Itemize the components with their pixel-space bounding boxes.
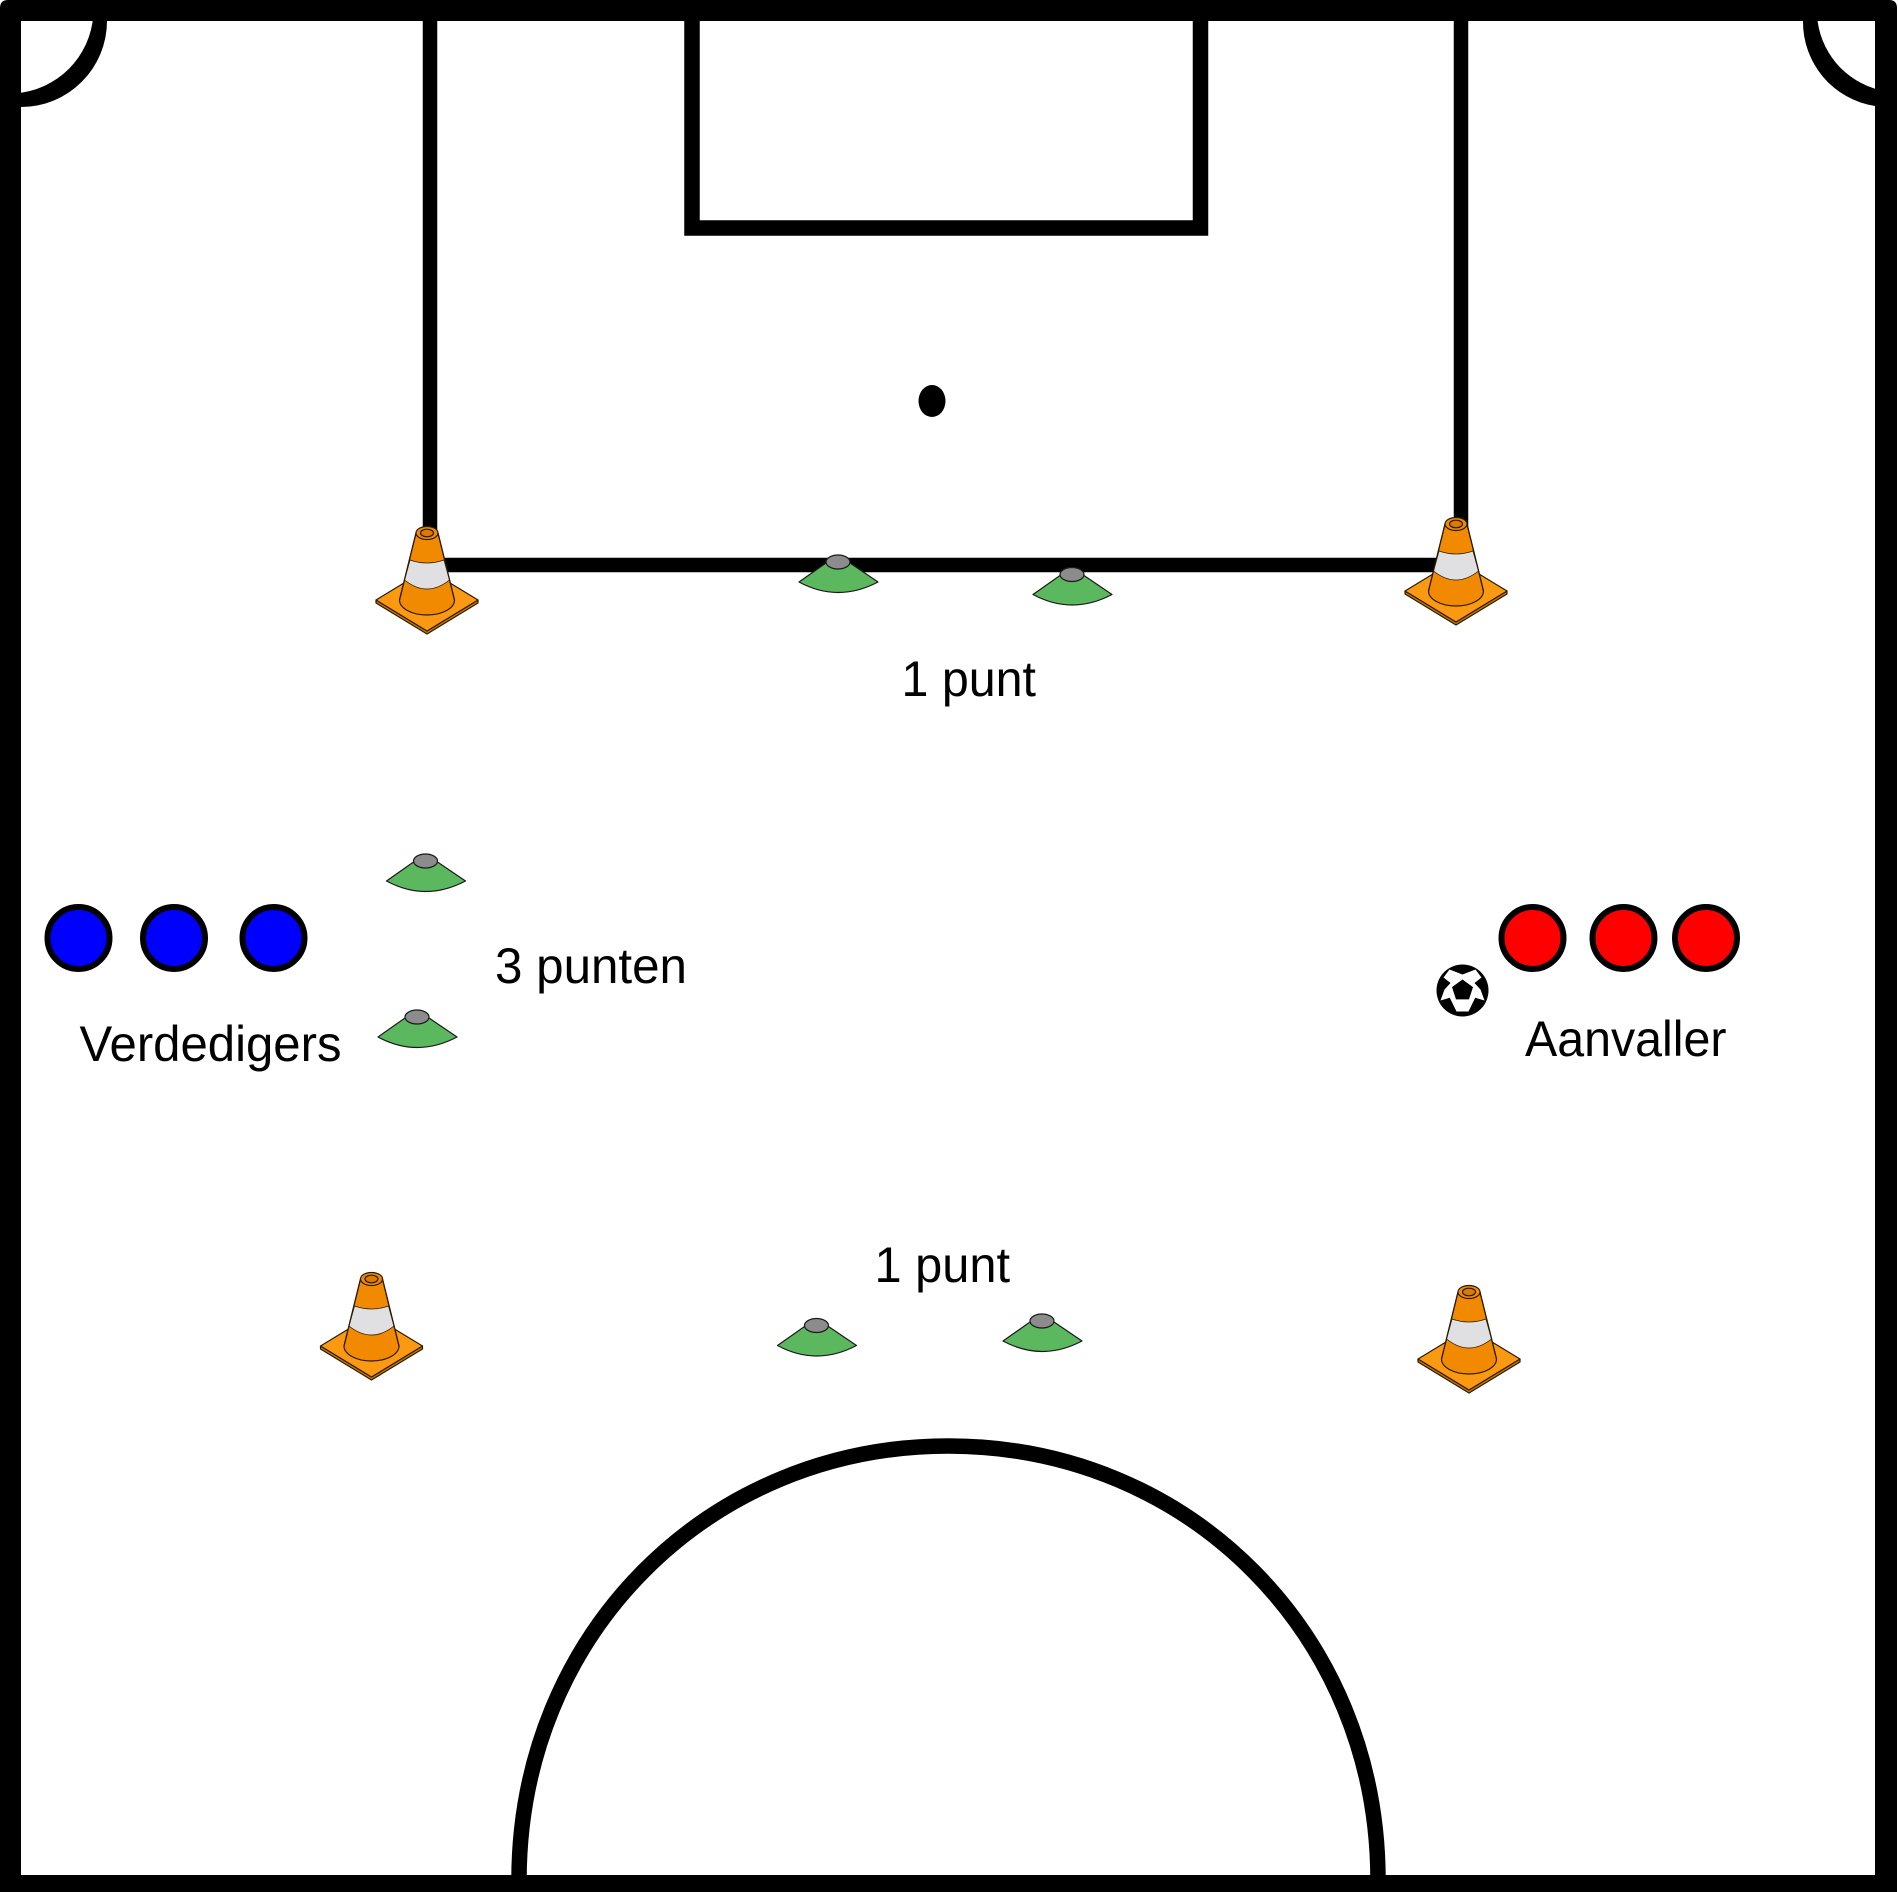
cone bottom right: [1418, 1286, 1520, 1393]
corner arc left: [15, 15, 107, 107]
icon: soccer ball: [1436, 964, 1488, 1016]
cone top left: [376, 526, 478, 634]
penalty arc: [519, 1446, 1378, 1880]
label: 1 punt top: 1 punt: [902, 651, 1036, 707]
label: 1 punt bottom: 1 punt: [874, 1237, 1010, 1293]
cone bottom left: [320, 1272, 422, 1380]
green discs: [378, 555, 1112, 1356]
cone top right: [1405, 518, 1507, 625]
label: Aanvaller: Aanvaller: [1525, 1011, 1726, 1067]
penalty area: [430, 10, 1461, 565]
penalty spot: [918, 385, 946, 417]
disc bottom goal 1: [778, 1318, 856, 1356]
disc left goal lower: [378, 1010, 457, 1048]
label: 3 punten: 3 punten: [495, 938, 687, 994]
goal area: [692, 10, 1200, 228]
disc top goal 1: [799, 555, 878, 592]
disc left goal upper: [386, 854, 466, 892]
disc top goal 2: [1033, 568, 1112, 605]
label: Verdedigers: Verdedigers: [80, 1016, 342, 1072]
disc bottom goal 2: [1003, 1314, 1082, 1352]
corner arc right: [1803, 15, 1880, 106]
orange cones: [320, 518, 1520, 1393]
blue defenders: [48, 907, 304, 969]
red attackers: [1502, 907, 1737, 969]
